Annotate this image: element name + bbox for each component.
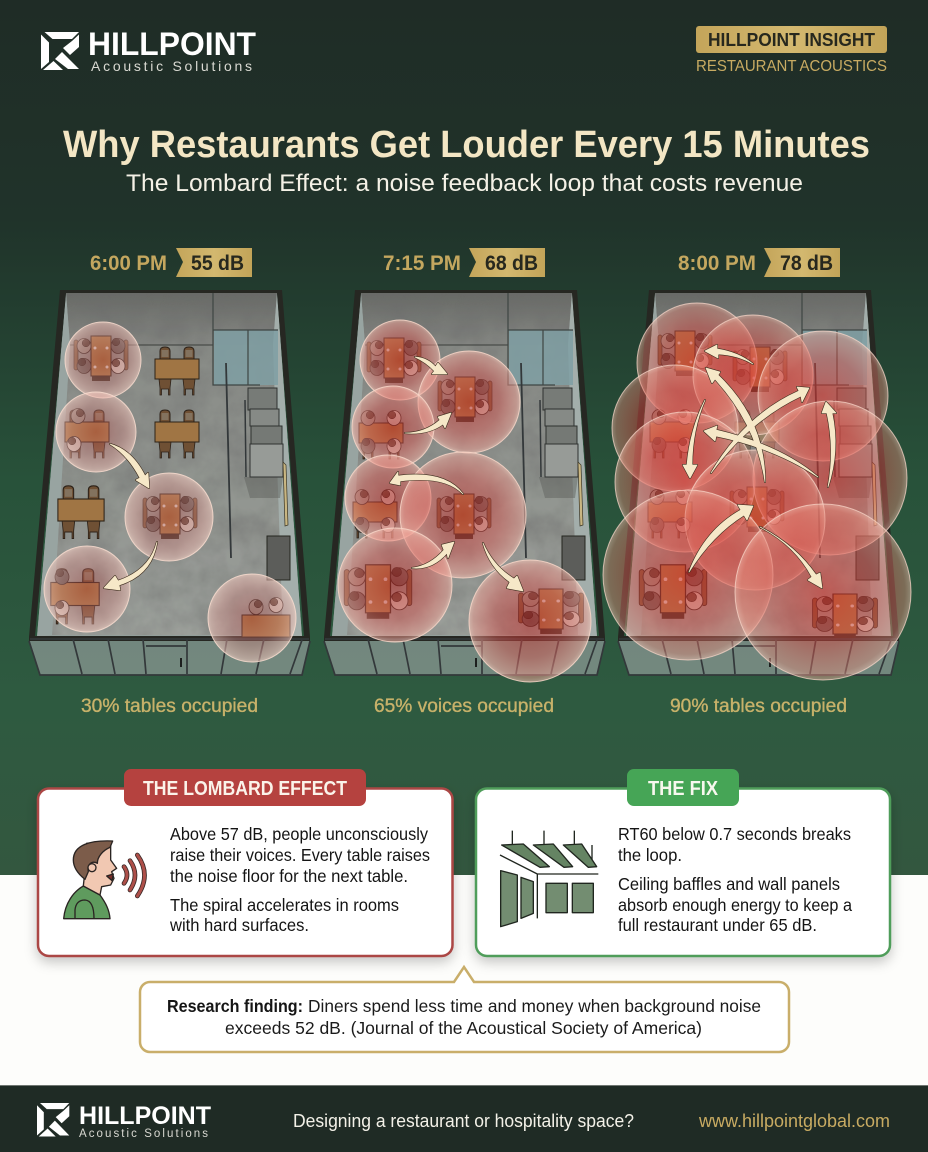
sound circles: 8:00 PM <box>603 303 911 680</box>
caption: 30% tables occupied: 30% tables occupied <box>81 696 258 717</box>
caption: 65% voices occupied: 65% voices occupied <box>374 696 554 717</box>
heading: the Lombard effect <box>124 769 366 806</box>
time label: 6:00 PM 55 dB: 6:00 PM <box>90 252 167 275</box>
sound circles: 7:15 PM <box>338 320 591 682</box>
text: Lombard explanation: The spiral accelerates in rooms <box>170 895 399 915</box>
panel: floor plan at 6:00 PM <box>29 290 310 675</box>
title: Why Restaurants Get Louder Every 15 Minutes <box>63 124 870 166</box>
header badge <box>696 26 887 75</box>
text: Lombard explanation: with hard surfaces. <box>169 915 309 935</box>
footer logo: HILLPOINT <box>79 1102 211 1130</box>
arrows: 6:00 PM <box>104 444 157 590</box>
footer <box>0 1085 928 1152</box>
arrows: 7:15 PM <box>390 357 523 591</box>
header badge: RESTAURANT ACOUSTICS <box>696 58 887 75</box>
header logo <box>41 26 256 74</box>
time label: 6:00 PM 55 dB: 55 dB <box>191 252 244 275</box>
footer prompt: Designing a restaurant or hospitality space? <box>293 1111 634 1131</box>
icon: ceiling baffles and wall panels <box>500 831 598 927</box>
text: fix explanation: full restaurant under 65 dB. <box>618 915 817 935</box>
panel: floor plan at 8:00 PM <box>603 290 911 680</box>
header logo: Acoustic Solutions <box>91 58 252 74</box>
text: Lombard explanation <box>169 824 430 935</box>
time label: 7:15 PM 68 dB: 68 dB <box>485 252 538 275</box>
time label: 8:00 PM 78 dB: 78 dB <box>780 252 833 275</box>
text: fix explanation: the loop. <box>618 845 682 865</box>
text: Lombard explanation: raise their voices. Every table raises <box>170 845 430 865</box>
header badge: HILLPOINT INSIGHT <box>708 30 875 50</box>
tables: 6:00 PM <box>51 336 290 637</box>
time label: 6:00 PM 55 dB <box>90 248 252 277</box>
heading: the fix: THE FIX <box>648 778 719 800</box>
panel: floor plan at 7:15 PM <box>324 290 605 682</box>
icon: person speaking <box>64 841 144 919</box>
footer URL: www.hillpointglobal.com <box>698 1111 890 1131</box>
callout: research finding: Research finding: <box>167 996 303 1016</box>
caption: 90% tables occupied: 90% tables occupied <box>670 696 847 717</box>
heading: the fix <box>627 769 739 806</box>
callout: research finding: exceeds 52 dB. (Journal of the Acoustical Society of America) <box>225 1018 702 1038</box>
text: fix explanation <box>618 824 852 935</box>
sound circles: 6:00 PM <box>44 322 296 662</box>
panel: the fix <box>476 769 890 956</box>
panel: the Lombard effect <box>38 769 452 956</box>
text: fix explanation: RT60 below 0.7 seconds breaks <box>618 824 851 844</box>
time label: 8:00 PM 78 dB <box>678 248 840 277</box>
text: Lombard explanation: Above 57 dB, people unconsciously <box>170 824 428 844</box>
header logo: HILLPOINT <box>88 26 256 62</box>
footer logo: Acoustic Solutions <box>79 1128 208 1140</box>
tables: 7:15 PM <box>344 338 583 634</box>
text: fix explanation: absorb enough energy to keep a <box>618 895 852 915</box>
subtitle: The Lombard Effect: a noise feedback loop that costs revenue <box>126 170 803 197</box>
time label: 7:15 PM 68 dB: 7:15 PM <box>383 252 461 275</box>
text: fix explanation: Ceiling baffles and wall panels <box>618 874 840 894</box>
time label: 8:00 PM 78 dB: 8:00 PM <box>678 252 756 275</box>
text: Lombard explanation: the noise floor for the next table. <box>170 866 408 886</box>
arrows: 8:00 PM <box>683 345 836 588</box>
callout: research finding: Diners spend less time and money when background noise <box>308 996 761 1016</box>
tables: 8:00 PM <box>639 331 877 639</box>
footer logo <box>37 1102 211 1140</box>
callout: research finding <box>140 967 789 1052</box>
heading: the Lombard effect: THE LOMBARD EFFECT <box>143 778 347 800</box>
time label: 7:15 PM 68 dB <box>383 248 545 277</box>
